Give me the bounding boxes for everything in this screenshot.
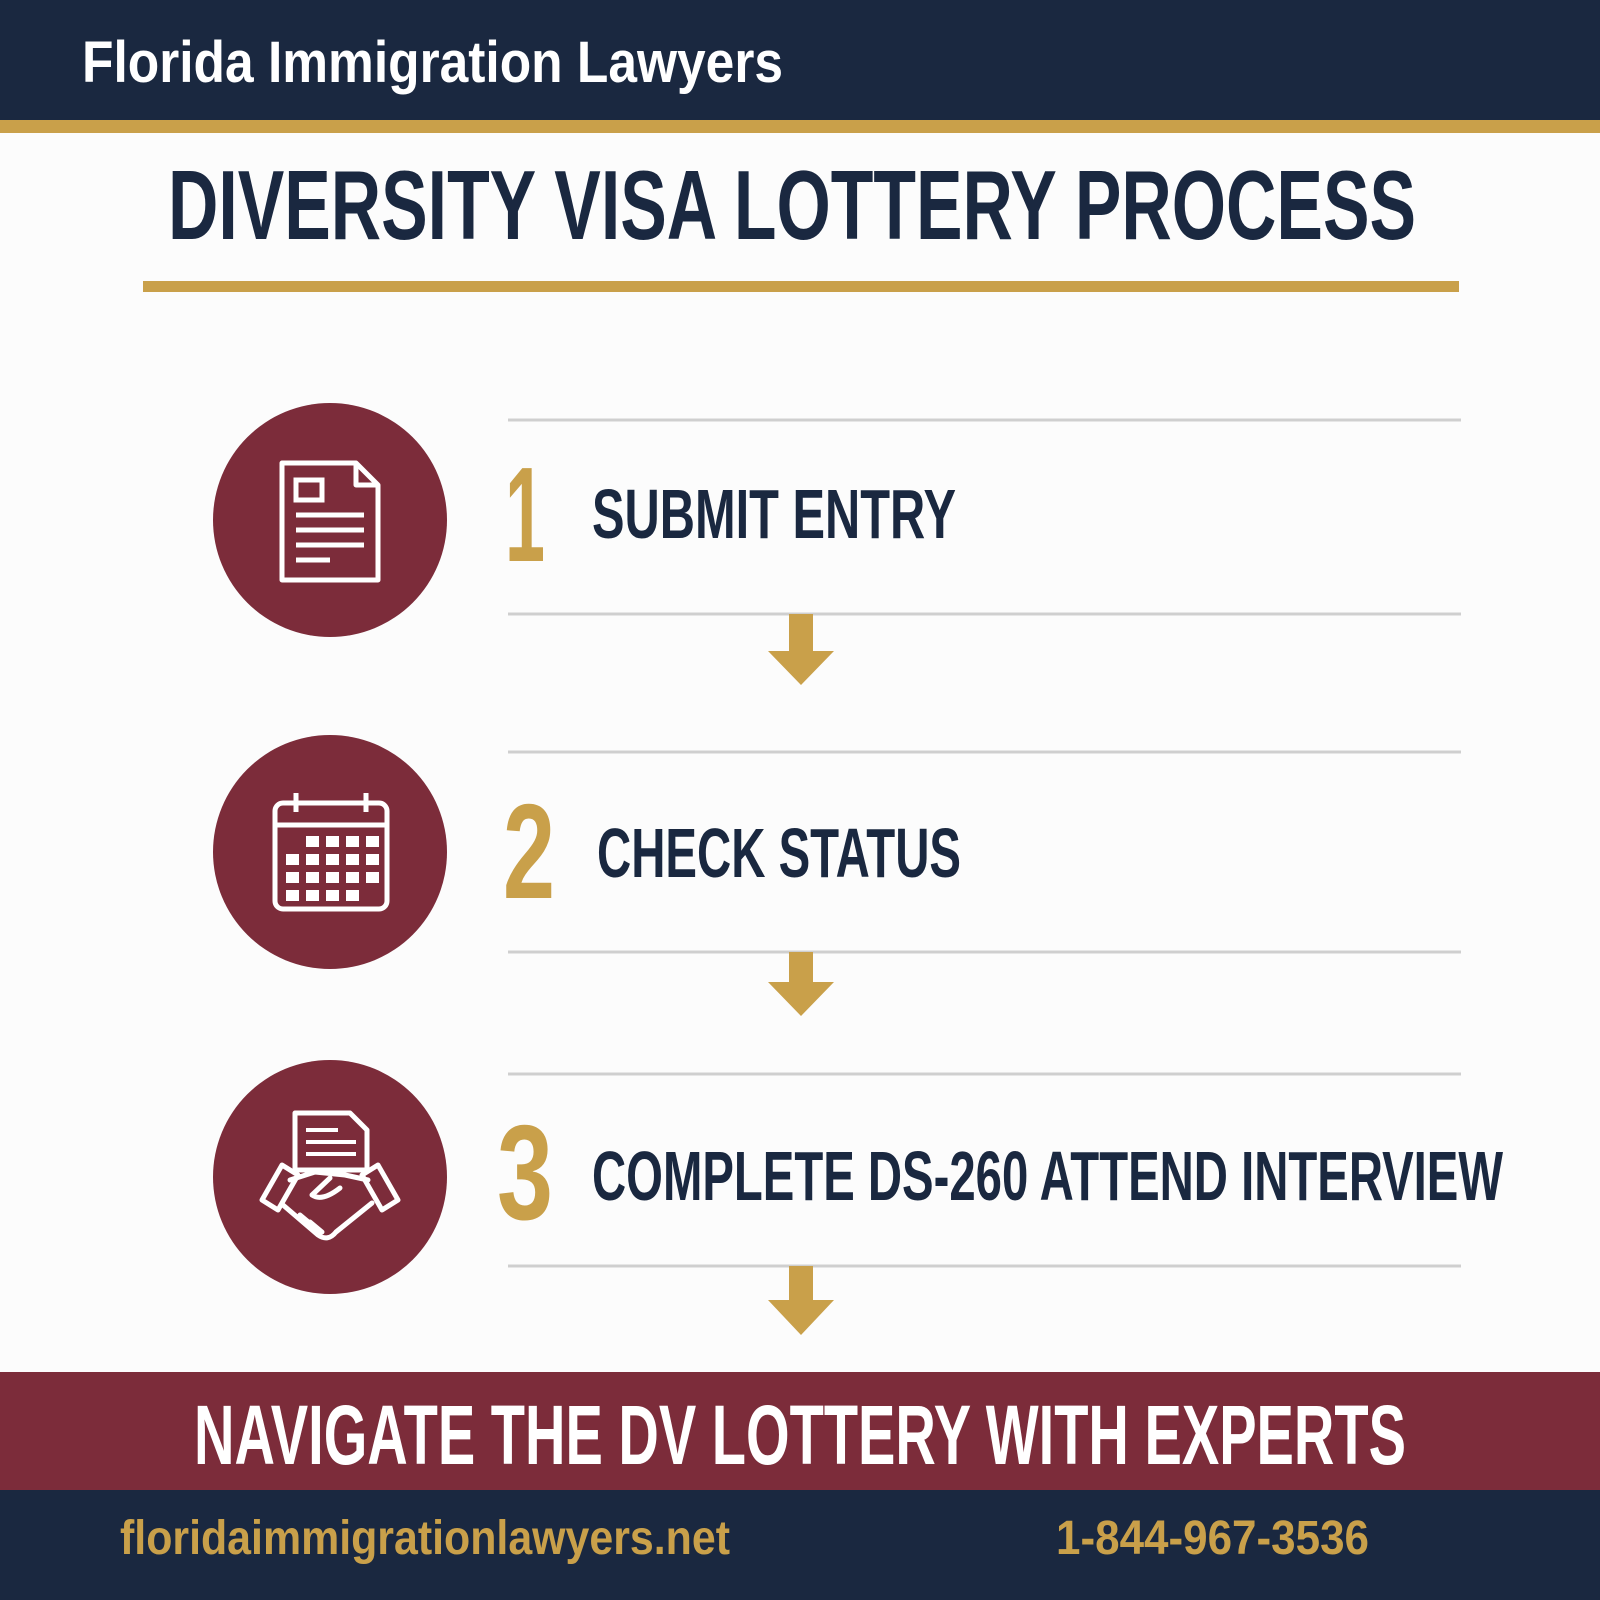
header bar: [0, 0, 1600, 133]
number 3: 3: [497, 1097, 553, 1248]
footer: [0, 1490, 1600, 1600]
step 2: [213, 735, 1461, 969]
title underline: [143, 281, 1459, 292]
phone: 1-844-967-3536: [1056, 1512, 1369, 1565]
step 1 label: SUBMIT ENTRY: [592, 475, 956, 553]
arrow 2: [768, 952, 834, 1016]
step 3: [213, 1060, 1503, 1294]
icon: document and handshake: [213, 1060, 447, 1294]
website: floridaimmigrationlawyers.net: [120, 1512, 730, 1565]
header brand name: Florida Immigration Lawyers: [82, 30, 783, 95]
icon: document: [213, 403, 447, 637]
icon: calendar: [213, 735, 447, 969]
step 2 label: CHECK STATUS: [597, 814, 961, 892]
number 1: 1: [505, 439, 545, 590]
arrow 1: [768, 614, 834, 685]
number 2: 2: [503, 776, 555, 927]
arrow 3: [768, 1266, 834, 1335]
step 1: [213, 403, 1461, 637]
